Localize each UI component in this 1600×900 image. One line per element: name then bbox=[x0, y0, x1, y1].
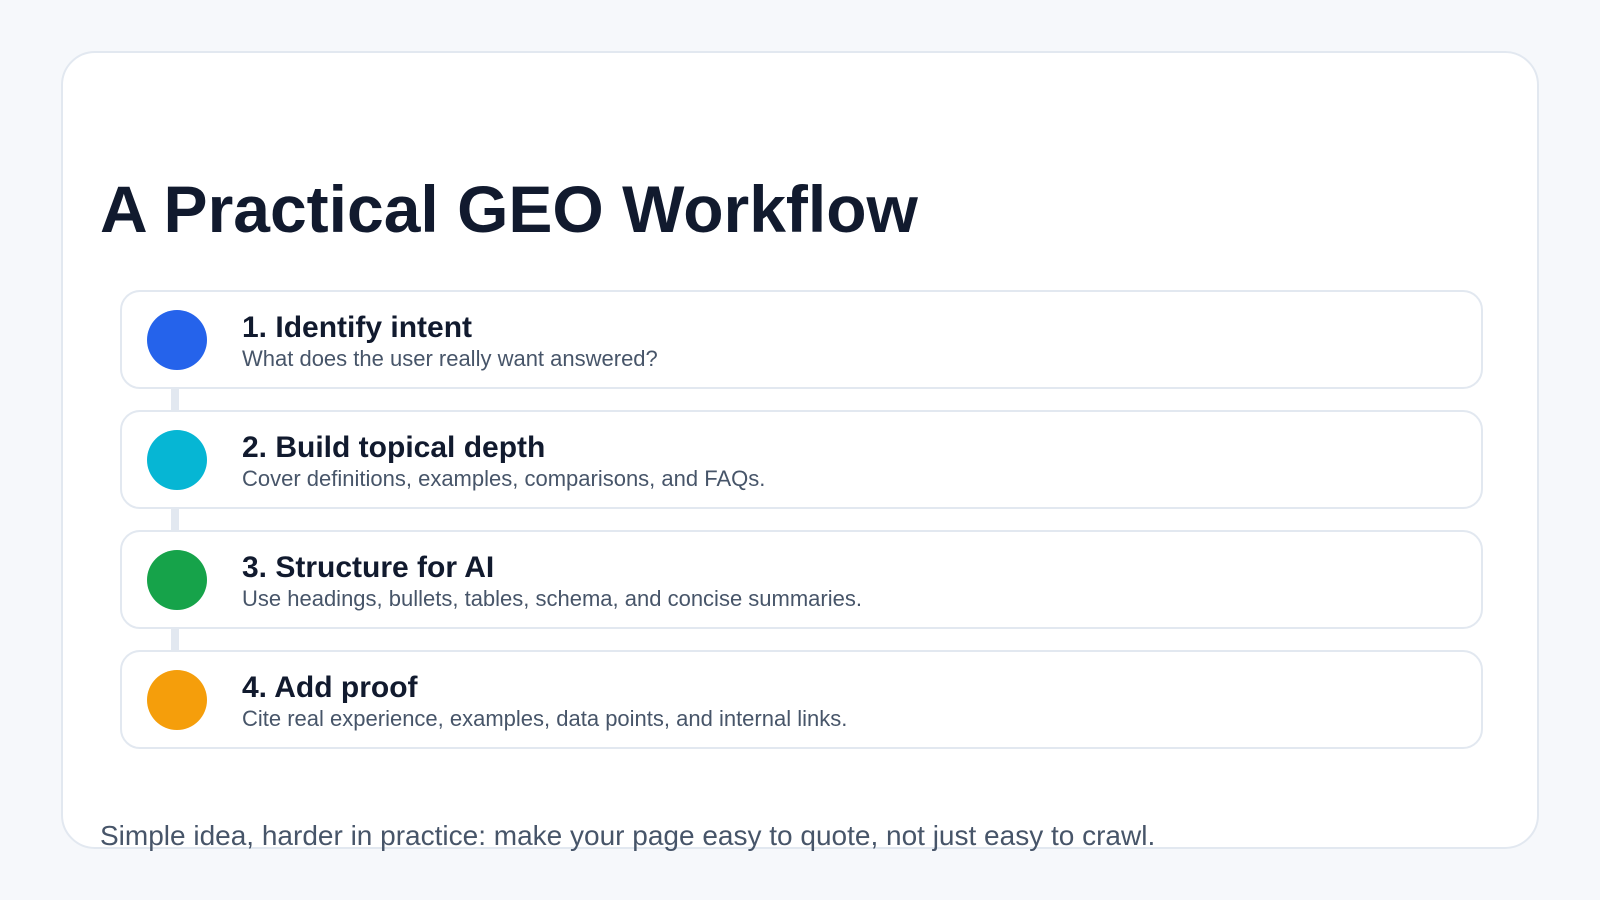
step 4 bbox=[120, 650, 1483, 749]
title: A Practical GEO Workflow bbox=[100, 172, 918, 246]
step 4 text: Cite real experience, examples, data points, and internal links. bbox=[242, 706, 847, 731]
step 2 title: 2. Build topical depth bbox=[242, 431, 545, 464]
connector 1-2 bbox=[171, 386, 179, 416]
step 3 text: Use headings, bullets, tables, schema, and concise summaries. bbox=[242, 586, 862, 611]
icon: cyan dot bbox=[147, 430, 207, 490]
icon: blue dot bbox=[147, 310, 207, 370]
step 1 title: 1. Identify intent bbox=[242, 311, 472, 344]
footer text: Simple idea, harder in practice: make your page easy to quote, not just easy to crawl. bbox=[100, 820, 1155, 851]
connector 2-3 bbox=[171, 506, 179, 536]
step 3 title: 3. Structure for AI bbox=[242, 551, 494, 584]
step 3 bbox=[120, 530, 1483, 629]
step 4 title: 4. Add proof bbox=[242, 671, 418, 704]
step 1 bbox=[120, 290, 1483, 389]
icon: green dot bbox=[147, 550, 207, 610]
step 2 bbox=[120, 410, 1483, 509]
connector 3-4 bbox=[171, 626, 179, 656]
step 1 text: What does the user really want answered? bbox=[242, 346, 658, 371]
icon: orange dot bbox=[147, 670, 207, 730]
step 2 text: Cover definitions, examples, comparisons, and FAQs. bbox=[242, 466, 765, 491]
